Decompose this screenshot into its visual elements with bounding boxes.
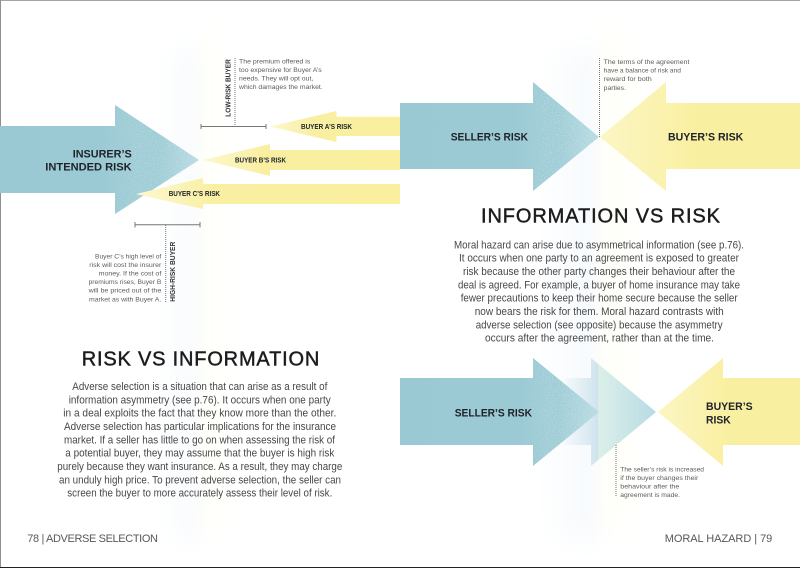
text block: adverse selection: purely because they want insurance. As a result, they may charge [57,461,342,473]
callout: buyer C cost: risk will cost the insurer [89,262,162,269]
label: high-risk buyer: HIGH-RISK BUYER [170,242,177,302]
panel: adverse selection diagram [0,58,400,303]
panel: balanced risk diagram [400,58,800,191]
arrow: buyer A's risk: BUYER A’S RISK [301,122,353,131]
callout: buyer A premium: The premium offered is [239,58,311,65]
callout: seller's increased risk: if the buyer changes their [620,475,699,482]
callout: buyer C cost: premiums rises, Buyer B [89,279,161,286]
footer: right page number: MORAL HAZARD | 79 [665,533,772,545]
text block: adverse selection: information asymmetry (see p.76). It occurs when one party [69,394,331,406]
arrow: buyer B's risk: BUYER B’S RISK [235,156,287,165]
callout: buyer C cost [88,253,162,303]
text block: moral hazard: deal is agreed. For example, a buyer of home insurance may take [458,279,740,291]
footer: left page number: 78 | ADVERSE SELECTION [27,533,158,545]
arrow: buyer B's risk [203,144,400,176]
callout: buyer C cost: Buyer C’s high level of [95,253,161,260]
text block: adverse selection [57,381,342,500]
arrow: buyer C's risk: BUYER C’S RISK [169,189,221,198]
arrow: seller's risk: SELLER’S RISK [455,408,532,420]
callout: seller's increased risk [616,445,704,499]
text block: adverse selection: Adverse selection is a situation that can arise as a result of [72,381,327,393]
bracket: low-risk buyer [201,58,266,129]
callout: buyer A premium: needs. They will opt out, [239,76,313,82]
callout: buyer A premium: which damages the market. [238,84,323,91]
callout: buyer C cost: will be priced out of the [88,288,162,295]
text block: moral hazard [454,239,744,345]
callout: seller's increased risk: behaviour after the [620,484,680,490]
arrow: buyer's risk: BUYER’S RISK [668,132,743,144]
text block: adverse selection: an unduly high price. To prevent adverse selection, the seller can [59,474,341,486]
text block: moral hazard: now bears the risk for them. Moral hazard contrasts with [475,306,724,318]
text block: adverse selection: in a deal exploits the fact that they know more than the other. [63,408,336,420]
callout: balanced terms: parties. [604,85,626,92]
arrow: buyer's risk: BUYER’S [706,401,753,413]
text block: moral hazard: occurs after the agreement, rather than at the time. [485,333,714,345]
arrow: buyer's risk [600,82,800,191]
text block: moral hazard: fewer precautions to keep their home secure because the seller [461,293,738,305]
arrow: buyer A's risk [270,111,400,142]
text block: moral hazard: risk because the other party changes their behaviour after the [463,266,735,278]
arrow: buyer C's risk [136,178,400,209]
arrow: buyer's risk [658,358,800,466]
callout: seller's increased risk: The seller’s risk is increased [620,466,704,473]
bracket: high-risk buyer [135,222,200,303]
text block: adverse selection: screen the buyer to more accurately assess their level of risk. [67,488,332,500]
callout: balanced terms: reward for both [604,76,652,83]
text block: adverse selection: Adverse selection has particular implications for the insurance [64,421,336,433]
callout: buyer A premium [238,58,323,91]
callout: buyer A premium: too expensive for Buyer A’s [239,67,322,74]
callout: balanced terms: have a balance of risk and [604,68,681,75]
heading: risk vs information: RISK VS INFORMATION [82,348,319,370]
callout: balanced terms: The terms of the agreement [604,59,690,66]
callout: seller's increased risk: agreement is made. [620,492,680,499]
label: low-risk buyer: LOW-RISK BUYER [226,59,232,117]
text block: moral hazard: It occurs when one party to an agreement is exposed to greater [459,253,739,265]
arrow: ghost shifted seller's risk [565,358,656,466]
arrow: insurer's intended risk: INTENDED RISK [45,162,132,174]
arrow: insurer's intended risk [0,105,199,214]
text block: adverse selection: market. If a seller has little to go on when assessing the risk of [64,434,335,446]
text block: moral hazard: Moral hazard can arise due to asymmetrical information (see p.76). [454,239,744,251]
text block: adverse selection: a potential buyer, they may assume that the buyer is high risk [65,448,335,460]
arrow: buyer's risk: RISK [706,414,731,426]
arrow: seller's risk: SELLER’S RISK [451,132,528,144]
panel: shifted risk diagram [400,358,800,499]
arrow: seller's risk [400,358,599,466]
callout: buyer C cost: market as with Buyer A. [89,296,161,303]
callout: buyer C cost: money. If the cost of [99,270,162,278]
arrow: seller's risk [400,82,599,191]
callout: balanced terms [600,58,690,137]
text block: moral hazard: adverse selection (see opposite) because the asymmetry [476,319,723,331]
heading: information vs risk: INFORMATION VS RISK [481,206,721,228]
arrow: insurer's intended risk: INSURER’S [73,148,132,160]
